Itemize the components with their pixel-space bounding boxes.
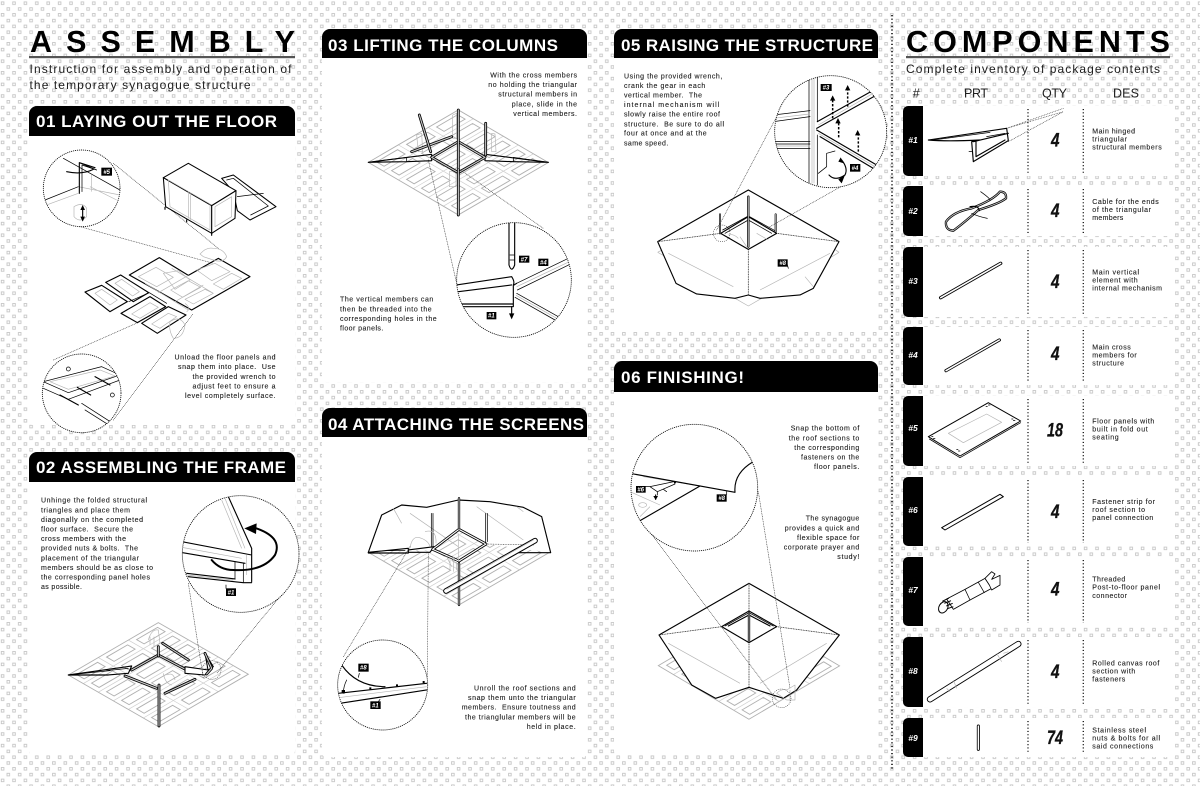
description: structure bbox=[1092, 360, 1124, 367]
text: 05 instructions: four at once and at the bbox=[624, 131, 707, 138]
roof canvas rear bbox=[368, 500, 551, 553]
text: 04 instructions: Unroll the roof sections and bbox=[474, 686, 576, 693]
diagram: crate and floor panels bbox=[42, 150, 276, 433]
tab #8 bbox=[903, 637, 923, 707]
dotted projection lines bbox=[53, 163, 218, 420]
subtitle: assembly bbox=[30, 62, 292, 92]
description bbox=[1092, 199, 1159, 222]
description: Stainless steel bbox=[1092, 728, 1146, 735]
label #8: #8 bbox=[718, 496, 726, 502]
label #8: #8 bbox=[779, 261, 787, 267]
text: 03 first instruction: no holding the triangular bbox=[488, 82, 578, 89]
row: part 8 bbox=[903, 637, 1175, 707]
text: 03 second instruction: corresponding holes in the bbox=[340, 316, 437, 323]
text: 02 instructions: triangles and place them bbox=[41, 507, 130, 514]
central opening and columns bbox=[720, 197, 777, 249]
text: 05 instructions: internal mechanism will bbox=[624, 102, 720, 109]
tab #7 bbox=[903, 557, 923, 626]
projection lines bbox=[648, 492, 790, 700]
icon: bolt bbox=[974, 726, 983, 749]
tab #6 bbox=[903, 477, 923, 546]
icon: vertical element rod bbox=[941, 263, 1001, 298]
text: 04 instructions: snap them unto the triangular bbox=[468, 695, 576, 702]
text: 03 first instruction bbox=[488, 72, 578, 118]
text: 04 instructions: held in place. bbox=[527, 724, 576, 731]
row: part 4 bbox=[903, 327, 1175, 385]
description: Fastener strip for bbox=[1092, 499, 1156, 506]
text: 01 instructions: level completely surface. bbox=[185, 393, 276, 400]
tab #4: #4 bbox=[908, 350, 918, 360]
ghost hand sketches bbox=[170, 248, 227, 338]
label #1: #1 bbox=[372, 703, 379, 709]
projection lines bbox=[188, 583, 280, 678]
text: 06 first instruction: Snap the bottom of bbox=[791, 426, 859, 433]
row: part 3 bbox=[903, 247, 1175, 317]
quantity: 4 bbox=[1050, 131, 1060, 152]
label #8 bbox=[778, 259, 788, 268]
table column headings: PRT bbox=[964, 87, 988, 101]
description: fasteners bbox=[1092, 677, 1126, 684]
label #8: #8 bbox=[360, 666, 367, 672]
description: nuts & bolts for all bbox=[1092, 736, 1160, 743]
heading: 01 bbox=[29, 106, 295, 136]
description: Main hinged bbox=[1092, 128, 1135, 135]
projection lines bbox=[428, 160, 543, 283]
description: Threaded bbox=[1092, 577, 1125, 584]
text: 01 instructions: snap them into place. Use bbox=[178, 364, 276, 371]
description: Rolled canvas roof bbox=[1092, 660, 1159, 667]
quantity: 4 bbox=[1050, 580, 1060, 601]
quantity: 4 bbox=[1050, 662, 1060, 683]
text: 02 instructions: floor surface. Secure the bbox=[41, 526, 133, 533]
heading: 03 bbox=[322, 29, 587, 58]
folded triangular members and cross members bbox=[68, 630, 213, 726]
text: 06 second instruction: flexible space for bbox=[797, 535, 860, 542]
text: 05 instructions: vertical member. The bbox=[624, 93, 702, 100]
floor grid bbox=[368, 110, 548, 215]
row: part 5 bbox=[903, 396, 1175, 466]
floor grid bbox=[658, 612, 840, 719]
text: 05 instructions: structure. Be sure to do all bbox=[624, 121, 724, 128]
tab #8: #8 bbox=[908, 666, 918, 676]
text: 02 instructions: as possible. bbox=[41, 584, 82, 591]
table column headings: DES bbox=[1113, 87, 1139, 101]
quantity: 4 bbox=[1050, 201, 1060, 222]
text: 06 second instruction: provides a quick and bbox=[785, 525, 859, 532]
description: internal mechanism bbox=[1092, 286, 1162, 293]
text: 02 instructions: diagonally on the completed bbox=[41, 517, 143, 524]
text: 03 first instruction: structural members in bbox=[498, 92, 577, 99]
title: assembly: ASSEMBLY bbox=[30, 25, 295, 59]
description bbox=[1092, 577, 1160, 600]
description bbox=[1092, 270, 1162, 293]
description bbox=[1092, 418, 1154, 442]
heading: 01: 01 LAYING OUT THE FLOOR bbox=[36, 112, 277, 131]
text: 01 instructions: adjust feet to ensure a bbox=[192, 384, 276, 390]
description: Main vertical bbox=[1092, 270, 1139, 277]
table column headings: QTY bbox=[1042, 87, 1068, 101]
title: components: COMPONENTS bbox=[906, 25, 1170, 59]
text: 03 second instruction: then be threaded into the bbox=[340, 306, 432, 313]
description: said connections bbox=[1092, 744, 1154, 751]
floor grid bbox=[368, 500, 550, 605]
text: 03 first instruction: vertical members. bbox=[513, 111, 577, 118]
row: part 1 bbox=[903, 106, 1175, 176]
floor grid bbox=[68, 623, 248, 727]
heading: 04 bbox=[322, 408, 587, 437]
tab #6: #6 bbox=[908, 505, 918, 515]
tab #1: #1 bbox=[908, 135, 918, 145]
crate lid bbox=[222, 175, 276, 220]
detail circle: gear crank bbox=[773, 76, 887, 188]
text: 04 instructions: members. Ensure toutness and bbox=[462, 705, 576, 712]
label #3: #3 bbox=[823, 86, 830, 92]
icon: floor panel bbox=[928, 403, 1021, 458]
description: element with bbox=[1092, 278, 1138, 285]
description: roof section to bbox=[1092, 507, 1145, 514]
text: 06 first instruction bbox=[789, 426, 859, 471]
panel: 06 finishing bbox=[614, 361, 878, 755]
text: 06 second instruction bbox=[784, 516, 860, 561]
tab #7: #7 bbox=[908, 585, 919, 595]
text: 05 instructions bbox=[624, 73, 724, 147]
frame and columns bbox=[368, 498, 487, 605]
text: 03 second instruction bbox=[340, 297, 437, 333]
text: 05 instructions: same speed. bbox=[624, 140, 668, 147]
diagram: columns bbox=[368, 110, 571, 337]
text: 02 instructions: Unhinge the folded structural bbox=[41, 498, 147, 505]
text: 03 first instruction: With the cross members bbox=[490, 72, 578, 79]
panel: 03 lifting the columns bbox=[322, 29, 587, 382]
heading: 06: 06 FINISHING! bbox=[621, 368, 744, 387]
text: 01 instructions: Unload the floor panels and bbox=[174, 354, 276, 362]
description: Main cross bbox=[1092, 344, 1131, 351]
text: 06 first instruction: the corresponding bbox=[794, 445, 859, 452]
detail circle: post threading bbox=[457, 220, 571, 337]
text: 06 first instruction: floor panels. bbox=[814, 464, 859, 471]
tab #5: #5 bbox=[908, 423, 918, 433]
text: 03 second instruction: floor panels. bbox=[340, 326, 383, 333]
description: section with bbox=[1092, 668, 1135, 675]
text: 04 instructions: the trianglular members will be bbox=[465, 714, 576, 721]
description bbox=[1092, 728, 1160, 751]
crate bbox=[163, 163, 236, 235]
text: 03 first instruction: place, slide in the bbox=[512, 101, 577, 108]
subtitle: components: Complete inventory of package contents bbox=[906, 62, 1160, 76]
text: 02 instructions: placement of the triangular bbox=[41, 555, 140, 562]
description: seating bbox=[1092, 435, 1119, 442]
text: 06 second instruction: The synagogue bbox=[806, 516, 859, 523]
fastener sketch bbox=[777, 685, 795, 702]
row: part 9 bbox=[903, 718, 1175, 757]
rolled canvas bbox=[446, 540, 535, 591]
text: 06 second instruction: study! bbox=[837, 554, 859, 561]
tab #4 bbox=[903, 327, 923, 385]
row: part 6 bbox=[903, 477, 1175, 546]
description: structural members bbox=[1092, 145, 1162, 152]
heading: 05: 05 RAISING THE STRUCTURE bbox=[621, 36, 873, 55]
description: connector bbox=[1092, 593, 1128, 600]
description bbox=[1092, 499, 1156, 522]
panel: 01 laying out the floor bbox=[29, 106, 295, 433]
detail circle: panel joint bbox=[42, 354, 123, 433]
diagram: frame laid on floor bbox=[68, 496, 299, 727]
diagram: finished synagogue bbox=[630, 424, 840, 719]
divider between assembly and components bbox=[891, 15, 893, 770]
text: 05 instructions: Using the provided wrench, bbox=[624, 73, 722, 80]
tab #9 bbox=[903, 718, 923, 757]
label #6: #6 bbox=[637, 487, 645, 493]
icon: hinged triangular member bbox=[928, 108, 1063, 162]
floor panels assembled bbox=[129, 258, 250, 310]
quantity: 4 bbox=[1050, 502, 1060, 523]
tab #2: #2 bbox=[908, 206, 918, 216]
label #1: #1 bbox=[228, 590, 234, 596]
heading: 02 bbox=[29, 452, 295, 482]
tab #3: #3 bbox=[908, 276, 918, 286]
tab #3 bbox=[903, 247, 923, 317]
text: 02 instructions bbox=[41, 498, 153, 591]
central opening bbox=[722, 611, 777, 643]
icon: fastener strip bbox=[942, 494, 1003, 530]
subtitle: assembly: Instruction for assembly and operation of bbox=[30, 62, 292, 76]
detail circle: leveling foot bbox=[43, 150, 120, 227]
text: 02 instructions: cross members with the bbox=[41, 536, 126, 543]
description: Post-to-floor panel bbox=[1092, 585, 1160, 592]
row: part 2 bbox=[903, 186, 1175, 236]
panel: 02 assembling the frame bbox=[29, 452, 299, 755]
text: 06 first instruction: the roof sections to bbox=[789, 435, 859, 442]
description: Cable for the ends bbox=[1092, 199, 1159, 206]
text: 05 instructions: slowly raise the entire roof bbox=[624, 112, 720, 119]
table column headings bbox=[913, 87, 1139, 101]
heading: 06 bbox=[614, 361, 878, 392]
floor corners bbox=[658, 248, 839, 306]
projection lines bbox=[717, 117, 847, 230]
diagram: raised roof bbox=[658, 76, 887, 306]
icon: cross member rod bbox=[946, 340, 999, 371]
description: members bbox=[1092, 215, 1124, 222]
roof bbox=[659, 583, 839, 698]
roof bbox=[658, 190, 839, 298]
text: 01 instructions: the provided wrench to bbox=[192, 374, 276, 381]
text: 06 first instruction: fasteners on the bbox=[801, 454, 859, 461]
description bbox=[1092, 344, 1137, 367]
projection lines bbox=[343, 547, 428, 677]
description: members for bbox=[1092, 352, 1137, 359]
label #5: #5 bbox=[103, 170, 111, 176]
loose floor panels bbox=[85, 275, 186, 333]
panel: 04 attaching the screens bbox=[322, 408, 587, 757]
heading: 05 bbox=[614, 29, 878, 58]
description: panel connection bbox=[1092, 515, 1153, 522]
quantity: 18 bbox=[1047, 421, 1063, 442]
description: triangular bbox=[1092, 136, 1128, 143]
text: 01 instructions bbox=[174, 354, 276, 400]
text: 04 instructions bbox=[462, 686, 576, 731]
text: 02 instructions: provided nuts & bolts. The bbox=[41, 546, 138, 553]
subtitle: assembly: the temporary synagogue structure bbox=[30, 78, 251, 92]
quantity: 74 bbox=[1047, 728, 1063, 749]
icon: rolled canvas bbox=[930, 644, 1018, 699]
description bbox=[1092, 128, 1162, 152]
description: Floor panels with bbox=[1092, 418, 1154, 425]
text: 02 instructions: the corresponding panel holes bbox=[41, 574, 150, 581]
text: 06 second instruction: corporate prayer and bbox=[784, 544, 859, 551]
label #4: #4 bbox=[852, 166, 859, 172]
description: built in fold out bbox=[1092, 426, 1148, 433]
tab #1 bbox=[903, 106, 923, 176]
frame and vertical columns bbox=[368, 110, 548, 215]
row: part 7 bbox=[903, 557, 1175, 626]
tab #5 bbox=[903, 396, 923, 466]
label #7: #7 bbox=[521, 257, 528, 263]
table column headings: # bbox=[913, 87, 920, 101]
label #1: #1 bbox=[488, 314, 495, 320]
heading: 04: 04 ATTACHING THE SCREENS bbox=[328, 415, 584, 434]
description: of the triangular bbox=[1092, 207, 1152, 214]
text: 02 instructions: members should be as close to bbox=[41, 565, 153, 572]
icon: cable loop bbox=[946, 192, 1006, 231]
detail circle: roof fastening bbox=[338, 640, 428, 730]
diagram: canvas screens bbox=[338, 498, 551, 730]
heading: 02: 02 ASSEMBLING THE FRAME bbox=[36, 458, 286, 477]
label #4: #4 bbox=[540, 260, 547, 266]
heading: 03: 03 LIFTING THE COLUMNS bbox=[328, 36, 558, 55]
tab #9: #9 bbox=[908, 733, 918, 743]
text: 03 second instruction: The vertical members can bbox=[340, 297, 433, 304]
panel: 05 raising the structure bbox=[614, 29, 887, 332]
quantity: 4 bbox=[1050, 344, 1060, 365]
icon: threaded post connector bbox=[937, 572, 1000, 615]
text: 05 instructions: crank the gear in each bbox=[624, 83, 705, 90]
description bbox=[1092, 660, 1159, 684]
detail circle: hinge bbox=[182, 496, 299, 612]
tab #2 bbox=[903, 186, 923, 236]
quantity: 4 bbox=[1050, 272, 1060, 293]
detail circle: bottom fastener bbox=[630, 424, 758, 551]
